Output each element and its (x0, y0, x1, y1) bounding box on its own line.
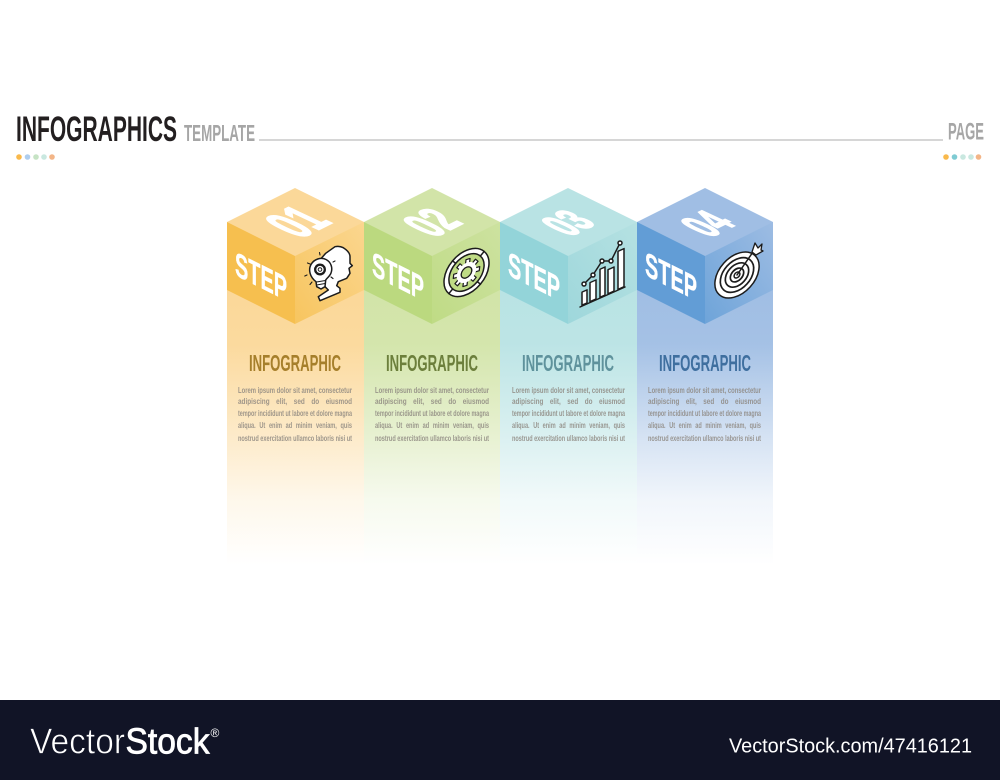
body text: adipiscing elit, sed do eiusmod (375, 397, 489, 406)
heading: INFOGRAPHIC (659, 350, 751, 376)
icon: rising bar chart (580, 241, 625, 307)
footer logo: Stock (126, 720, 210, 762)
body text (238, 386, 352, 443)
registered mark: ® (210, 726, 220, 740)
body text: adipiscing elit, sed do eiusmod (648, 397, 761, 406)
footer logo: Vector (30, 720, 125, 762)
body text: nostrud exercitation ullamco laboris nisi ut (648, 434, 761, 443)
body text: adipiscing elit, sed do eiusmod (238, 397, 352, 406)
body text: Lorem ipsum dolor sit amet, consectetur (375, 386, 489, 395)
heading: INFOGRAPHIC (522, 350, 614, 376)
body text: aliqua. Ut enim ad minim veniam, quis (512, 421, 625, 430)
body text (648, 386, 761, 443)
heading: INFOGRAPHIC (249, 350, 341, 376)
title: INFOGRAPHICS (16, 110, 177, 149)
icon: head with gear bulb (305, 246, 352, 301)
body text: adipiscing elit, sed do eiusmod (512, 397, 625, 406)
footer bar (0, 700, 1000, 780)
cube 2 (364, 188, 500, 324)
number 02: 02 (389, 202, 475, 243)
panel: step 4 (637, 188, 773, 565)
body text: aliqua. Ut enim ad minim veniam, quis (375, 421, 489, 430)
panel: step 3 (500, 188, 637, 565)
body text: aliqua. Ut enim ad minim veniam, quis (648, 421, 761, 430)
number 04: 04 (669, 205, 748, 243)
step label: STEP (235, 244, 287, 309)
panel: step 1 (227, 188, 364, 565)
body text (375, 386, 489, 443)
body text: Lorem ipsum dolor sit amet, consectetur (512, 386, 625, 395)
cube 1 (227, 188, 364, 324)
body text: tempor incididunt ut labore et dolore magna (512, 409, 625, 418)
icon: gear with cycle ring (435, 240, 498, 305)
body text: tempor incididunt ut labore et dolore magna (648, 409, 761, 418)
body text: Lorem ipsum dolor sit amet, consectetur (648, 386, 761, 395)
body text: tempor incididunt ut labore et dolore magna (375, 409, 489, 418)
number 01: 01 (251, 199, 346, 245)
step label: STEP (508, 244, 560, 309)
panel: step 2 (364, 188, 500, 565)
number 03: 03 (529, 204, 607, 242)
cube 3 (500, 188, 637, 324)
body text: nostrud exercitation ullamco laboris nisi ut (238, 434, 352, 443)
step label: STEP (645, 244, 697, 309)
body text: Lorem ipsum dolor sit amet, consectetur (238, 386, 352, 395)
heading: INFOGRAPHIC (386, 350, 478, 376)
step label: STEP (372, 244, 424, 309)
decorative dots: right (943, 154, 981, 160)
cube 4 (637, 188, 773, 324)
icon: target with arrow (706, 243, 768, 307)
body text: tempor incididunt ut labore et dolore magna (238, 409, 352, 418)
body text: aliqua. Ut enim ad minim veniam, quis (238, 421, 352, 430)
body text: nostrud exercitation ullamco laboris nisi ut (512, 434, 625, 443)
footer url: VectorStock.com/47416121 (729, 736, 972, 758)
decorative dots: left (16, 154, 55, 160)
subtitle: TEMPLATE (184, 120, 255, 146)
body text: nostrud exercitation ullamco laboris nisi ut (375, 434, 489, 443)
body text (512, 386, 625, 443)
